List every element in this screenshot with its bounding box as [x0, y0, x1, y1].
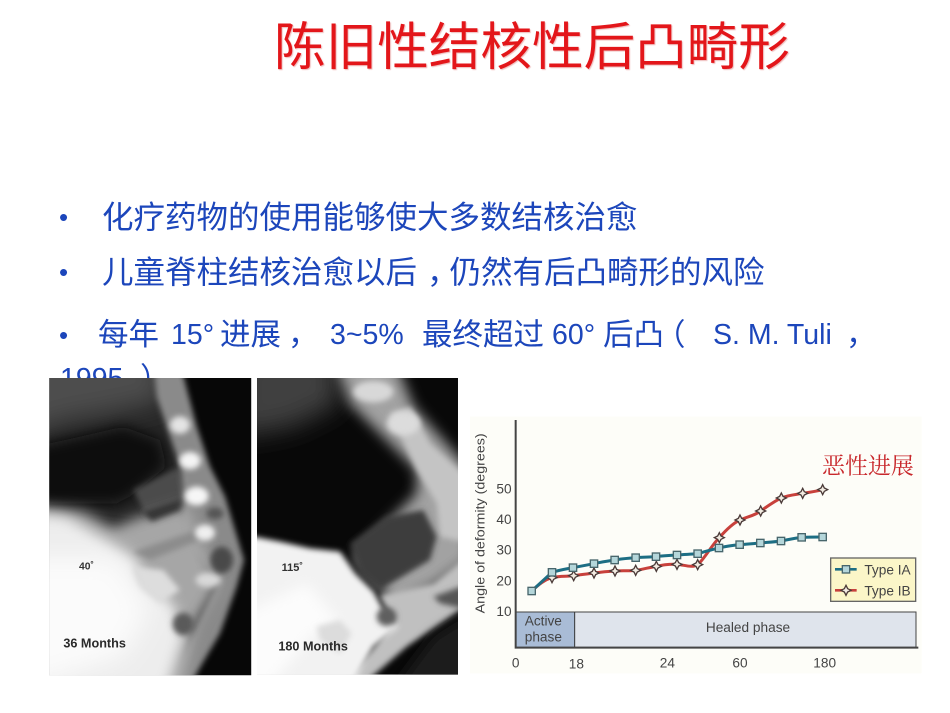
bullet 3 text: ，	[288, 318, 318, 352]
x-ray: 36 months	[49, 378, 252, 676]
series: type IA	[528, 533, 826, 595]
axes	[516, 420, 918, 648]
label: 115 degrees: 115˚	[282, 562, 303, 574]
bullet 2 text	[102, 254, 765, 290]
bullet 3 text	[98, 318, 876, 352]
label: active phase: Active	[525, 613, 562, 628]
bullet 2 text: 仍然有后凸畸形的风险	[450, 254, 765, 290]
x-ray: 180 months	[257, 378, 458, 675]
bullet 3 text: S. M. Tuli	[713, 319, 832, 351]
chart background	[470, 417, 922, 673]
line chart: angle of deformity	[470, 417, 922, 673]
bullet 1: •	[59, 202, 68, 232]
bullet list	[59, 199, 876, 396]
bullet 3 text: 60°	[552, 319, 595, 351]
phase band	[516, 612, 916, 647]
bullet 3 text: 进展	[220, 318, 281, 352]
bullet 3 text: ，	[846, 318, 876, 352]
collapsed vertebra shadow	[350, 510, 437, 590]
soft tissue transition	[49, 498, 220, 676]
x axis ticks: 18	[569, 657, 584, 672]
label: 36 months: 36 Months	[63, 636, 126, 650]
bullet 3 continuation: 1995	[60, 363, 123, 395]
vertebra highlights	[170, 416, 190, 434]
bullet 3 text: 15°	[171, 319, 214, 351]
title: 陈旧性结核性后凸畸形	[274, 18, 790, 76]
x axis ticks	[512, 655, 836, 672]
y axis ticks: 20	[496, 573, 512, 588]
bright abdomen	[49, 504, 190, 676]
bullet 3 text: 3~5%	[330, 319, 404, 351]
x axis ticks: 180	[813, 655, 836, 670]
bullet 2: •	[59, 257, 68, 287]
bullet 2 text: 儿童脊柱结核治愈以后	[102, 254, 417, 290]
spine column	[153, 363, 244, 690]
bullet 3 text: （	[655, 318, 686, 352]
legend: Type IB	[864, 583, 911, 598]
bone column	[331, 378, 458, 604]
y axis ticks	[496, 481, 512, 619]
series: type IB	[532, 485, 828, 591]
legend: Type IA	[864, 562, 912, 577]
y axis ticks: 40	[496, 512, 512, 527]
x axis ticks: 60	[732, 655, 748, 670]
lower bright band	[354, 560, 458, 675]
label: healed phase: Healed phase	[706, 620, 790, 635]
bullet 3: •	[59, 320, 68, 350]
x axis ticks: 0	[512, 655, 520, 670]
bullet 3 continuation	[60, 362, 170, 396]
bullet 3 continuation: ）	[140, 362, 170, 396]
label: 40 degrees: 40˚	[79, 560, 94, 572]
phase band: phase	[525, 629, 562, 644]
y axis title: Angle of deformity (degrees)	[473, 433, 488, 613]
bullet 1 text: 化疗药物的使用能够使大多数结核治愈	[102, 199, 638, 235]
bullet 3 text: 后凸	[603, 318, 664, 352]
y axis ticks: 30	[496, 543, 512, 558]
bullet 3 text: 最终超过	[422, 318, 544, 352]
y axis ticks: 50	[496, 481, 512, 496]
legend	[831, 558, 916, 601]
bullet 2 text: ，	[427, 254, 459, 290]
label: 180 months: 180 Months	[278, 640, 348, 654]
bright abdomen	[257, 532, 399, 674]
bullet 3 text: 每年	[98, 318, 159, 352]
annotation: malignant progression: 恶性进展	[822, 454, 914, 479]
x axis ticks: 24	[660, 655, 675, 670]
y axis ticks: 10	[496, 604, 512, 619]
figure: x-ray images and chart	[49, 378, 918, 676]
